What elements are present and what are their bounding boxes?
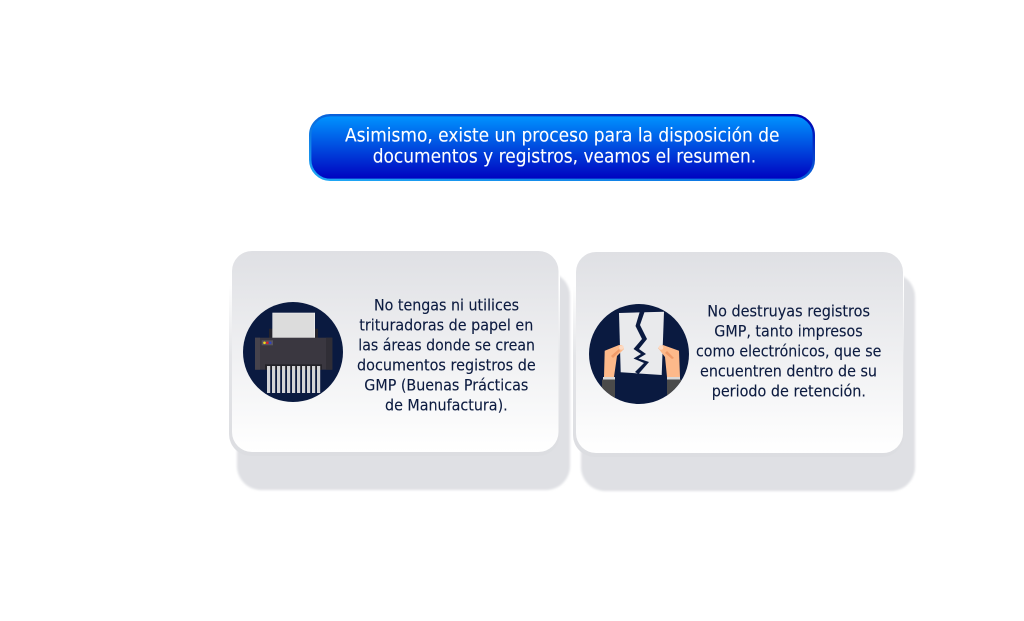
panel text: records: No destruyas registros [707,303,870,321]
header text: Asimismo, existe un proceso para la disposición de [345,126,780,146]
header text [345,126,780,168]
panel text: shredders [357,297,536,415]
panel text: records [696,303,881,401]
icon: paper shredder [243,302,343,402]
panel: no paper shredders [229,251,570,490]
panel text: shredders: documentos registros de [357,357,536,375]
panel: do not destroy records [573,252,915,491]
panel text: records: encuentren dentro de su [700,363,877,381]
icon: torn paper held by hands [589,304,689,404]
panel text: records: periodo de retención. [712,383,866,401]
panel text: shredders: GMP (Buenas Prácticas [364,377,528,395]
panel text: records: como electrónicos, que se [696,343,881,361]
header text: documentos y registros, veamos el resumen. [373,146,756,168]
panel text: records: GMP, tanto impresos [714,323,863,341]
panel text: shredders: de Manufactura). [385,397,508,415]
panel text: shredders: No tengas ni utilices [374,297,519,315]
panel text: shredders: trituradoras de papel en [359,317,533,335]
header banner [310,115,814,180]
panel text: shredders: las áreas donde se crean [358,337,535,355]
